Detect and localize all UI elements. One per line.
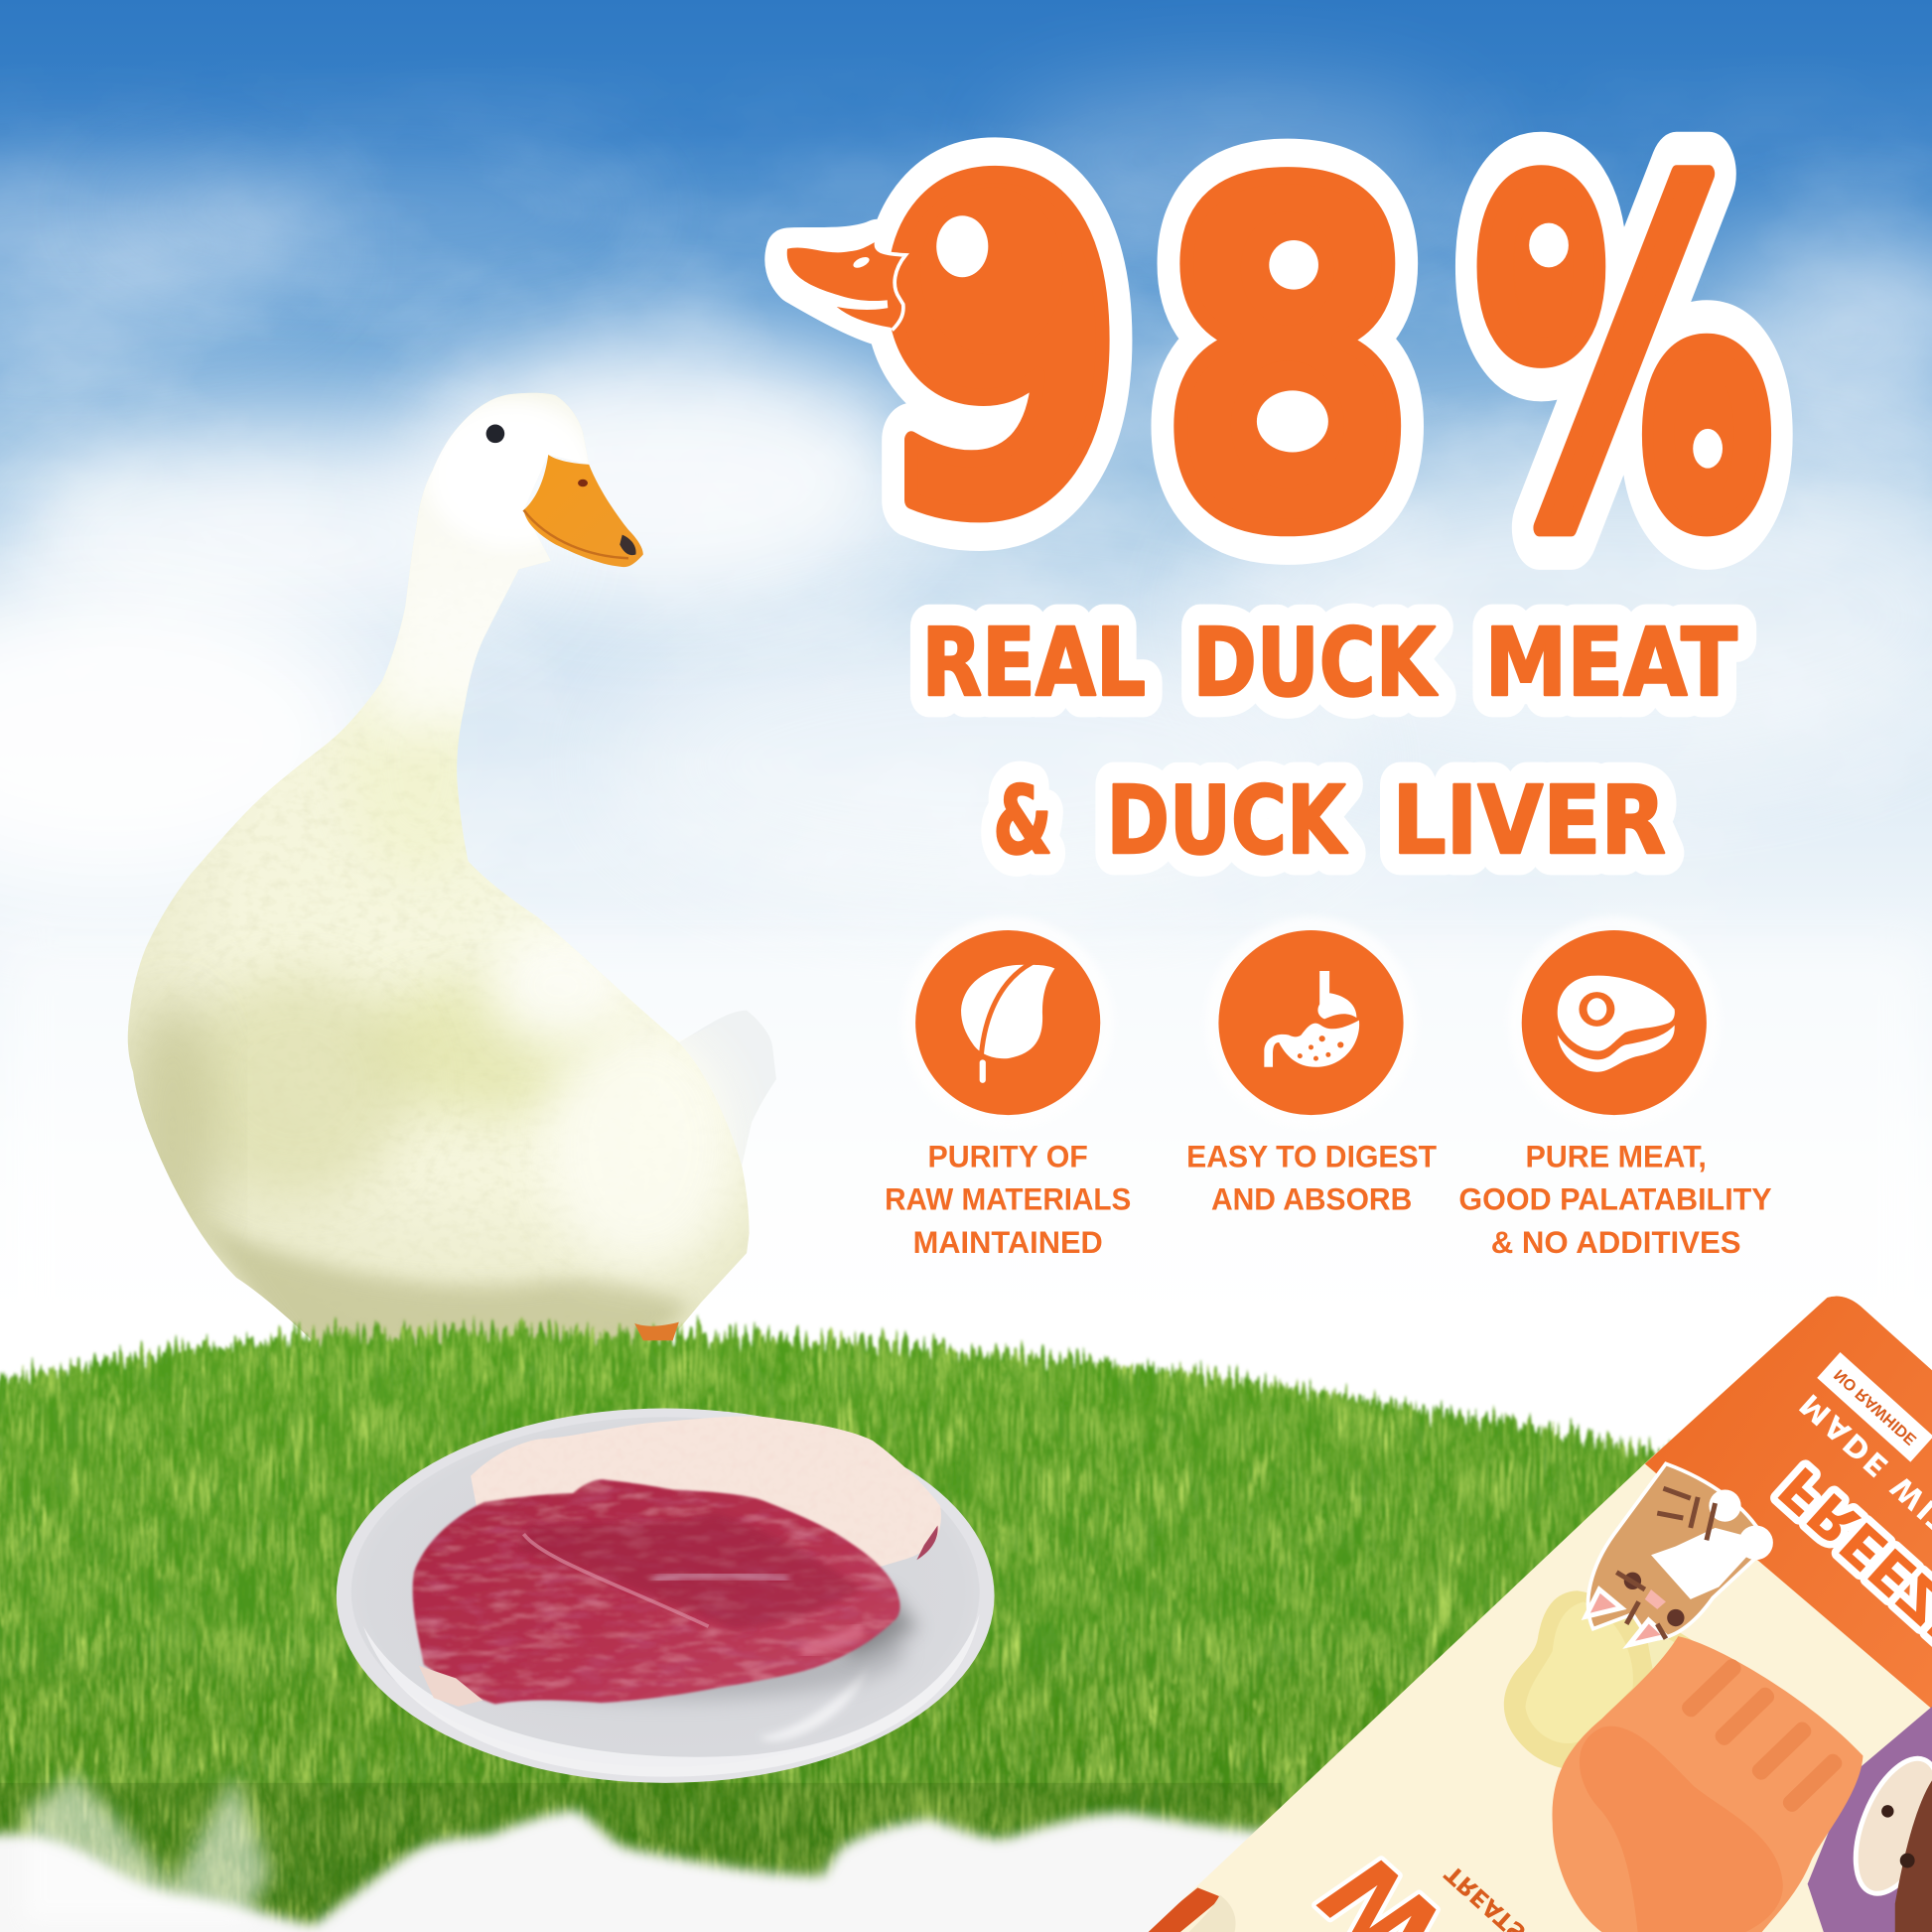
duck bill (523, 455, 643, 567)
pouch orange header (1645, 1297, 1932, 1709)
subheading real duck meat and duck liver (921, 609, 1737, 876)
label: & NO ADDITIVES (1491, 1225, 1741, 1260)
purple panel (1808, 1707, 1932, 1932)
label: RAW MATERIALS (885, 1182, 1131, 1217)
label: PURE MEAT, (1525, 1139, 1707, 1173)
label (885, 1139, 1131, 1260)
duck (126, 369, 776, 1355)
line 2: DUCK (1106, 766, 1348, 876)
raw meat (413, 1479, 899, 1707)
line 1: REAL (921, 609, 1146, 718)
label: GOOD PALATABILITY (1458, 1182, 1772, 1217)
headline white outline (785, 87, 1775, 632)
yellow treat (1504, 1590, 1726, 1769)
line 2: LIVER (1392, 766, 1666, 876)
duck tail (671, 1011, 776, 1166)
orange paw treat (1552, 1636, 1863, 1932)
line 1: DUCK (1192, 609, 1438, 718)
product pouch (1109, 1282, 1932, 1932)
grass hill (0, 1330, 1691, 1932)
duck skin (471, 1417, 941, 1589)
no rawhide tag: NO RAWHIDE (1831, 1366, 1920, 1449)
duck body (126, 369, 750, 1355)
label: EASY TO DIGEST (1186, 1139, 1437, 1173)
label (1186, 1139, 1437, 1217)
headline 98% (785, 87, 1775, 632)
subheading real duck meat and duck liver: LIVER (1392, 766, 1666, 876)
icon: stomach (1218, 930, 1404, 1115)
pouch body (1179, 1297, 1930, 1932)
line 1: MEAT (1484, 609, 1737, 718)
benefit: pure meat (1458, 916, 1772, 1260)
subheading real duck meat and duck liver: MEAT (1484, 609, 1737, 718)
icon: leaf (915, 930, 1100, 1115)
line 2: & (993, 766, 1052, 876)
benefit: easy to digest (1186, 916, 1437, 1217)
white cloud at bottom (0, 1774, 1307, 1932)
subheading real duck meat and duck liver: & (993, 766, 1052, 876)
label: MAINTAINED (913, 1225, 1103, 1260)
subheading real duck meat and duck liver: DUCK (1106, 766, 1348, 876)
line 2 (993, 766, 1666, 876)
duck foot (634, 1322, 679, 1340)
icon: steak (1522, 930, 1707, 1115)
headline white outline: 9 (876, 90, 1126, 614)
cat illustration (1586, 1463, 1773, 1645)
label: AND ABSORB (1211, 1182, 1412, 1217)
subheading real duck meat and duck liver: REAL (921, 609, 1146, 718)
no rawhide tag (1817, 1352, 1932, 1462)
dog illustration (1839, 1747, 1932, 1932)
duck beak (787, 241, 905, 301)
label: PURITY OF (928, 1139, 1088, 1173)
headline white outline: 8 (1158, 90, 1417, 632)
benefit: purity of raw materials (885, 916, 1131, 1260)
subheading real duck meat and duck liver: DUCK (1192, 609, 1438, 718)
plate (337, 1409, 995, 1783)
line 1 (921, 609, 1737, 718)
pouch seal detail (1144, 1887, 1236, 1932)
digit 8: 8 (1158, 90, 1417, 632)
label (1458, 1139, 1772, 1260)
percent sign: % (1472, 87, 1775, 632)
plate with duck breast (337, 1409, 995, 1783)
digit 9 with duck head: 9 (876, 90, 1126, 614)
headline white outline: % (1472, 87, 1775, 632)
duck eye (936, 215, 988, 277)
duck eye (486, 425, 504, 443)
